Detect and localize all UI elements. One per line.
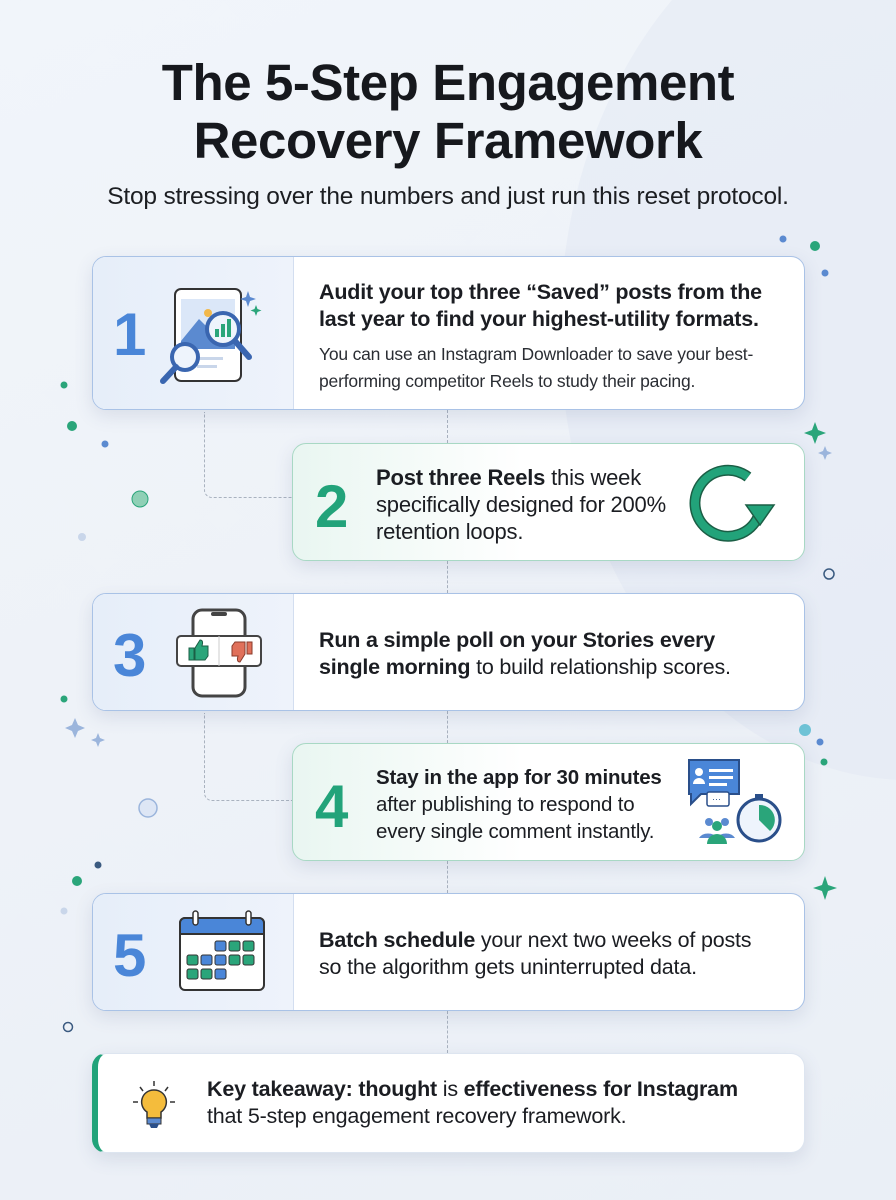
- title: The 5-Step Engagement: [162, 54, 734, 111]
- callout: key takeaway: [92, 1053, 805, 1153]
- icon: loop arrow: [690, 464, 776, 542]
- subtitle: Stop stressing over the numbers and just run this reset protocol.: [107, 183, 789, 210]
- icon: phone poll: [176, 608, 262, 698]
- step 4 text: Stay in the app for 30 minutes after publishing to respond to every single comment instantly.: [376, 766, 662, 843]
- number 3: 3: [113, 622, 146, 689]
- icon: magnifier over post: [160, 288, 262, 384]
- card 1: You can use an Instagram Downloader to save your best-performing competitor Reels to study their pacing.: [319, 344, 753, 391]
- step 5 text: Batch schedule your next two weeks of posts so the algorithm gets uninterrupted data.: [319, 928, 751, 979]
- number 1: 1: [113, 301, 146, 368]
- title: [162, 54, 734, 169]
- background soft shape: [560, 0, 896, 780]
- takeaway text: Key takeaway: thought is effectiveness for Instagram that 5-step engagement recovery framework.: [207, 1077, 738, 1128]
- icon: comments + stopwatch: [688, 759, 782, 844]
- icon: lightbulb: [133, 1081, 175, 1128]
- card 3: [92, 593, 805, 711]
- number 5: 5: [113, 922, 146, 989]
- step 2 text: Post three Reels this week specifically designed for 200% retention loops.: [376, 465, 666, 544]
- card 5: [92, 893, 805, 1011]
- card 4: [292, 743, 805, 861]
- title: Recovery Framework: [194, 112, 702, 169]
- step 3 text: Run a simple poll on your Stories every single morning to build relationship scores.: [319, 628, 731, 679]
- card 2: [292, 443, 805, 561]
- step 1 text: Audit your top three “Saved” posts from the last year to find your highest-utility formats.: [319, 280, 762, 331]
- number 2: 2: [315, 473, 348, 540]
- card 1: [92, 256, 805, 410]
- icon: comments + stopwatch: ···: [712, 794, 721, 804]
- number 4: 4: [315, 773, 348, 840]
- icon: calendar: [179, 910, 265, 991]
